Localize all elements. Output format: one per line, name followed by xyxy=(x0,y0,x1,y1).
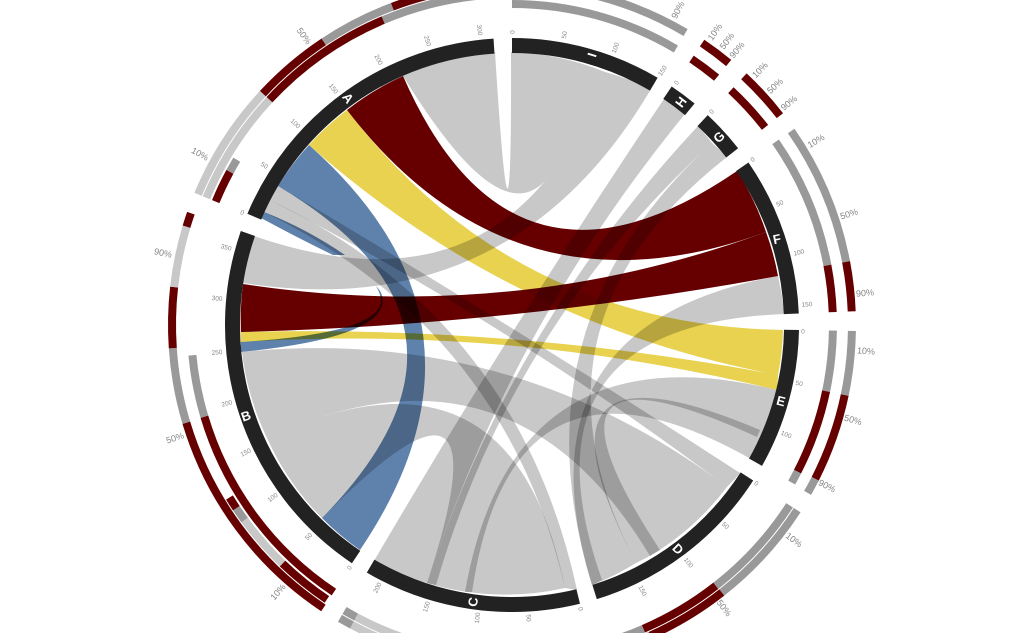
axis tick labels: 200 xyxy=(372,54,384,67)
axis tick labels: 0 xyxy=(753,480,760,488)
chord: C to A narrow xyxy=(264,200,577,590)
percent labels: 10% xyxy=(857,345,875,357)
percent labels: 50% xyxy=(165,430,185,446)
sector letters: B xyxy=(239,407,253,425)
sector letters: A xyxy=(339,90,357,107)
axis tick labels: 50 xyxy=(524,614,532,622)
sector letters xyxy=(239,51,787,608)
percent labels: 50% xyxy=(718,31,736,51)
chord: E to A yellow xyxy=(309,110,783,375)
percent labels: 90% xyxy=(669,0,687,20)
axis tick labels: 0 xyxy=(801,328,805,336)
percent labels: 10% xyxy=(784,531,804,549)
axis tick labels: 100 xyxy=(267,492,280,504)
percent labels: 50% xyxy=(843,413,863,427)
axis tick labels: 150 xyxy=(657,64,669,77)
track: A xyxy=(198,0,491,202)
chord: D to B xyxy=(242,348,727,556)
chord: C to B xyxy=(267,404,565,595)
axis tick labels: 0 xyxy=(239,209,245,217)
chord: A to I xyxy=(403,52,605,193)
axis tick labels: 100 xyxy=(289,118,302,131)
axis tick labels: 200 xyxy=(372,581,384,594)
track: C xyxy=(340,610,454,633)
percent labels: 50% xyxy=(295,26,313,46)
track: F xyxy=(776,131,852,312)
axis tick labels: 150 xyxy=(240,447,253,459)
chord: F to A red xyxy=(347,76,766,260)
chord: A thin blue wedge xyxy=(261,212,345,255)
sector ring xyxy=(232,46,792,604)
axis tick labels: 50 xyxy=(795,380,804,388)
chord: E to C xyxy=(465,377,777,592)
percent labels: 90% xyxy=(856,287,874,299)
percent labels: 90% xyxy=(153,246,173,260)
sector letters: I xyxy=(584,51,600,59)
track: E xyxy=(792,331,852,493)
chord: E to B thin yellow xyxy=(241,331,778,390)
percent labels: 90% xyxy=(817,477,837,495)
percent labels: 10% xyxy=(806,132,826,150)
track: D xyxy=(609,505,797,633)
axis tick labels: 150 xyxy=(801,301,813,309)
chord ribbons xyxy=(241,52,784,595)
axis tick labels: 150 xyxy=(636,585,648,598)
axis tick labels: 350 xyxy=(220,243,233,253)
sector letters: H xyxy=(672,94,690,110)
axis tick labels: 300 xyxy=(475,24,483,36)
axis tick labels: 150 xyxy=(327,83,339,96)
axis tick labels: 100 xyxy=(474,612,482,624)
axis tick labels: 0 xyxy=(750,156,757,164)
chord: F to B red xyxy=(241,232,778,332)
percent labels: 90% xyxy=(727,40,747,60)
chord: B to A blue xyxy=(278,145,425,550)
percent labels: 10% xyxy=(750,60,770,80)
chord: F to D xyxy=(574,276,784,585)
percent labels: 50% xyxy=(839,206,859,222)
axis tick labels: 0 xyxy=(673,79,681,86)
sector letters: D xyxy=(669,540,687,558)
outer quantile tracks xyxy=(172,0,852,633)
chord: E to D xyxy=(595,398,760,563)
percent labels: 90% xyxy=(779,93,799,113)
axis tick labels: 100 xyxy=(780,430,793,440)
axis tick labels: 100 xyxy=(611,41,621,54)
axis tick labels: 100 xyxy=(682,557,694,570)
track: I xyxy=(512,0,686,49)
axis tick labels xyxy=(211,24,813,624)
axis tick labels: 0 xyxy=(346,564,354,571)
chord: D to A xyxy=(270,186,740,487)
chord: I to B xyxy=(243,72,651,289)
axis tick labels: 0 xyxy=(576,606,584,612)
chord: G to D xyxy=(569,143,727,585)
percent labels xyxy=(153,0,875,618)
axis tick labels: 0 xyxy=(510,30,516,34)
axis tick labels: 0 xyxy=(708,108,716,116)
sector letters: F xyxy=(772,231,782,247)
percent labels: 10% xyxy=(190,145,210,163)
axis tick labels: 50 xyxy=(304,532,314,542)
axis tick labels: 250 xyxy=(211,349,223,357)
axis tick labels: 250 xyxy=(422,35,432,48)
chord: G to C xyxy=(427,126,712,585)
percent labels: 50% xyxy=(765,76,785,96)
sector letters: G xyxy=(710,128,728,146)
track: B xyxy=(172,213,334,608)
axis tick labels: 50 xyxy=(259,161,269,171)
percent labels: 50% xyxy=(715,598,733,618)
axis tick labels: 50 xyxy=(561,30,569,39)
axis tick labels: 100 xyxy=(793,248,805,258)
axis tick labels: 50 xyxy=(775,199,785,209)
chord: H to C xyxy=(374,99,685,583)
percent labels: 10% xyxy=(706,22,724,42)
percent labels: 10% xyxy=(268,582,288,602)
axis tick labels: 300 xyxy=(211,295,223,303)
sector letters: E xyxy=(775,393,787,409)
axis tick labels: 200 xyxy=(221,399,234,409)
track: G xyxy=(731,76,780,127)
axis tick labels: 50 xyxy=(720,521,730,531)
track: H xyxy=(692,43,729,78)
sector letters: C xyxy=(465,595,481,608)
axis tick labels: 150 xyxy=(422,600,432,613)
chord: B thin blue curl xyxy=(241,286,383,352)
